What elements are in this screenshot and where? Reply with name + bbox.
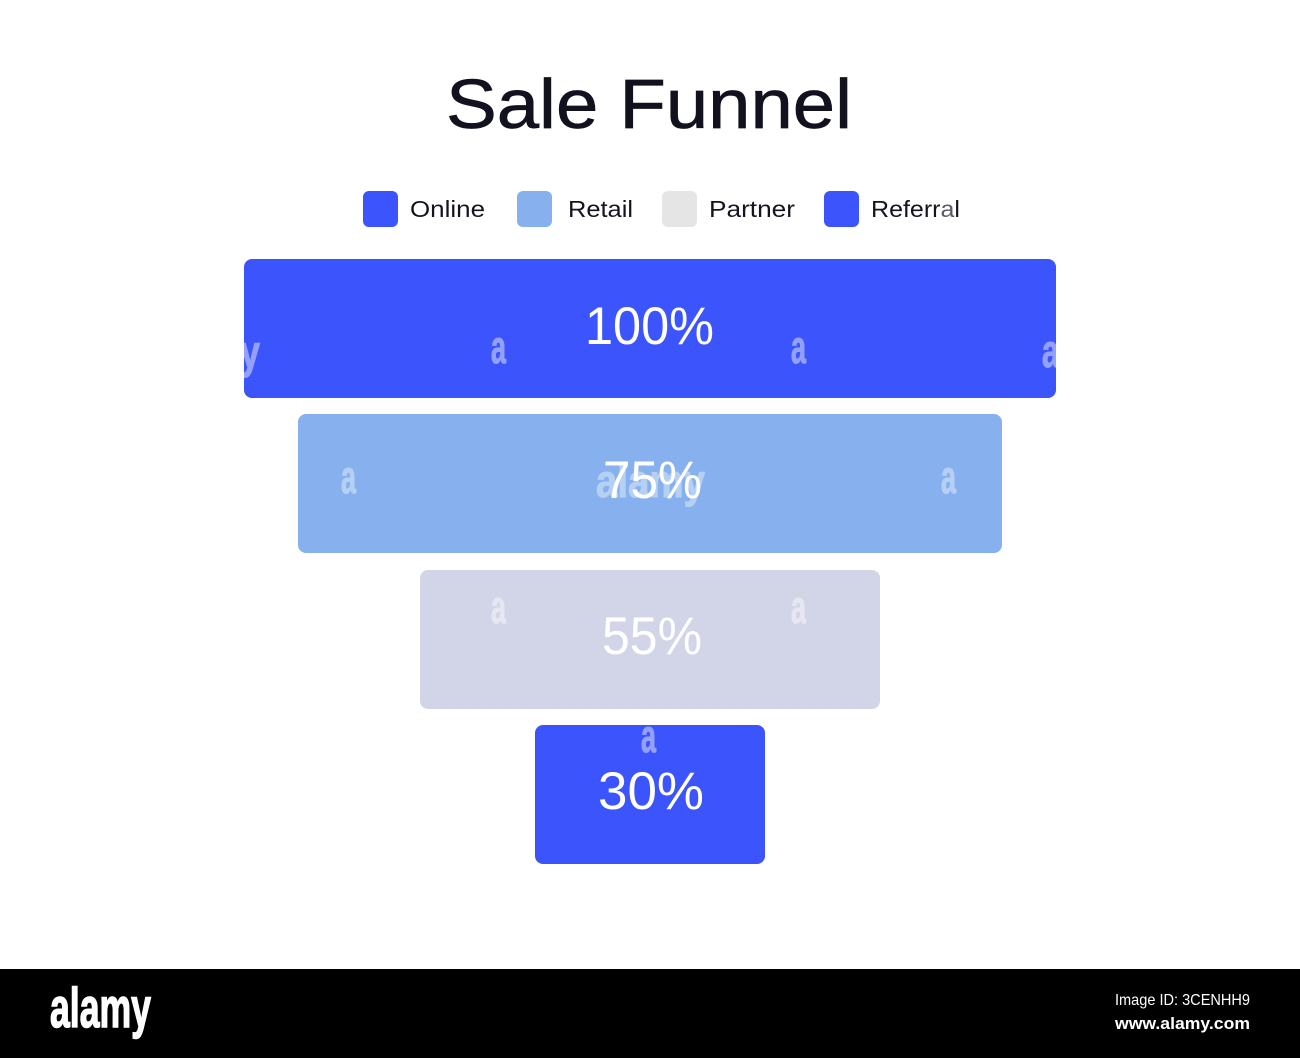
- legend item: Online: [363, 191, 485, 227]
- legend item: Online: Online: [410, 196, 485, 222]
- funnel bar: 100%: y: [240, 326, 260, 378]
- funnel bar: 100%: a: [791, 321, 806, 373]
- funnel bar: 30%: [535, 710, 765, 864]
- funnel bar: 30%: 30%: [598, 762, 704, 821]
- legend item: Partner: [662, 191, 795, 227]
- funnel bar: 100%: a: [491, 321, 506, 373]
- funnel bar: 75%: a: [341, 451, 356, 503]
- funnel bar: 75%: [298, 414, 1002, 553]
- funnel bar: 55%: a: [491, 581, 506, 633]
- funnel bar: 100%: [240, 259, 1059, 398]
- funnel bar: 55%: [420, 570, 880, 709]
- legend item: Referral: Referral: [871, 196, 960, 222]
- funnel bar: 75%: alamy: [596, 455, 705, 507]
- funnel bar: 30%: a: [641, 710, 656, 762]
- footer logo: alamy: [50, 976, 151, 1039]
- legend item: Partner: Partner: [709, 196, 795, 222]
- image id: Image ID: 3CENHH9: [1115, 992, 1250, 1009]
- funnel bar: 100%: a: [1042, 325, 1059, 377]
- footer bar: [0, 969, 1300, 1058]
- title: Sale Funnel: [446, 65, 852, 143]
- funnel bar: 100%: 100%: [585, 297, 714, 356]
- website: www.alamy.com: [1114, 1014, 1250, 1033]
- funnel bar: 55%: 55%: [602, 607, 702, 666]
- funnel bar: 55%: a: [791, 581, 806, 633]
- legend item: Retail: [517, 191, 633, 227]
- funnel bar: 75%: 75%: [603, 451, 702, 510]
- funnel bar: 75%: a: [941, 451, 956, 503]
- legend item: Retail: Retail: [568, 196, 633, 222]
- legend item: Referral: [824, 191, 960, 227]
- funnel chart: [240, 259, 1059, 864]
- legend: [363, 191, 960, 227]
